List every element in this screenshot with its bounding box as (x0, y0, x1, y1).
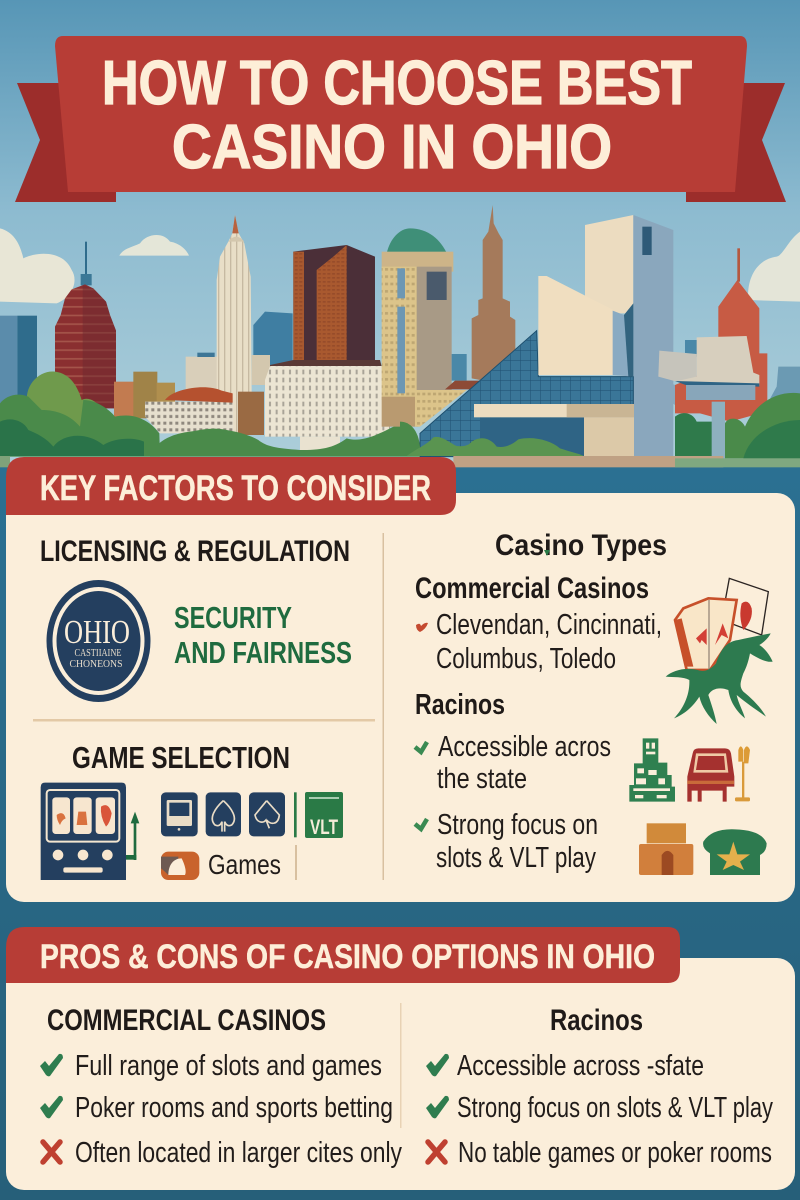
list: accessible across state: Accessible acros (438, 731, 611, 763)
icon: games badge (161, 852, 199, 880)
pro: poker rooms: Poker rooms and sports betting (75, 1092, 393, 1124)
building: low tan (382, 381, 482, 427)
heading: casino types: Casino Types (495, 529, 667, 562)
list: strong focus: Strong focus on (437, 809, 598, 841)
panel background (6, 493, 795, 902)
building: pale back (186, 353, 270, 390)
illustration: Ohio skyline left (0, 215, 400, 467)
list: strong focus (436, 809, 598, 874)
cloud: small (119, 235, 189, 256)
illustration: Ohio skyline right (382, 205, 800, 467)
icon: Ohio seal: OHIO (64, 614, 130, 651)
trees: left (0, 371, 400, 467)
building: brown spire tower (472, 205, 515, 380)
icon: orange building (639, 823, 693, 875)
teal background (0, 467, 800, 1200)
heading: commercial casinos column: COMMERCIAL CASINOS (47, 1004, 326, 1037)
building: blue mid (253, 312, 293, 365)
check: strong focus (415, 819, 427, 829)
spire (737, 248, 740, 282)
heading: licensing: LICENSING & REGULATION (40, 535, 350, 568)
title: CASINO IN OHIO (172, 113, 612, 182)
ribbon tail right (686, 83, 786, 202)
list: strong focus: slots & VLT play (436, 842, 596, 874)
sky background (0, 0, 800, 470)
heading: racinos column: Racinos (550, 1004, 643, 1037)
icon: Ohio seal: CHONEONS (70, 658, 122, 670)
pro: accessible: Accessible across -sfate (457, 1050, 704, 1082)
heading: commercial casinos: Commercial Casinos (415, 572, 649, 605)
cloud: large left (0, 228, 75, 303)
list: commercial cities (436, 609, 662, 675)
building: white offices (265, 360, 390, 451)
ribbon tail left (15, 83, 116, 202)
building: small brown (238, 392, 264, 435)
tab: key factors heading (6, 457, 456, 515)
building: red tower (675, 280, 767, 422)
building: blue left (0, 316, 37, 406)
building: red roof (145, 387, 233, 433)
text: security and fairness (174, 600, 352, 670)
icon: VLT tile (305, 792, 343, 839)
list: accessible across state: the state (437, 763, 527, 795)
con: larger cities: Often located in larger cites only (75, 1137, 402, 1169)
trees: right (400, 393, 800, 458)
tab: pros and cons heading (6, 927, 680, 983)
list: commercial cities: Clevendan, Cincinnati, (436, 609, 662, 641)
icon: slot machine (41, 783, 139, 880)
pro: full range: Full range of slots and games (75, 1050, 382, 1082)
panel: key factors (6, 457, 795, 902)
icon: Ohio seal (46, 580, 150, 702)
rock hall: angled wedge (538, 276, 633, 377)
rock hall: base block (584, 417, 634, 461)
icons: game tiles (161, 792, 297, 837)
buildings: low orange (114, 372, 175, 422)
rock hall: horizontal band (474, 404, 634, 417)
text: security and fairness: SECURITY (174, 600, 292, 635)
column: racinos (426, 1004, 773, 1169)
text: security and fairness: AND FAIRNESS (174, 635, 352, 670)
ribbon main (55, 36, 747, 192)
building: cream tower (217, 215, 252, 433)
rock hall: dark glass lower (480, 417, 585, 457)
icon: cards and horse (666, 578, 773, 724)
column: commercial casinos (40, 1004, 402, 1169)
icon: red chair and lamp (687, 746, 750, 802)
building: blue small (452, 354, 467, 381)
ground: waterfront strip (453, 456, 800, 467)
list: commercial cities: Columbus, Toledo (436, 643, 616, 675)
cloud: right (748, 232, 800, 302)
icon: building (629, 738, 675, 802)
building: brown brick tower (293, 245, 375, 363)
text: games: Games (208, 849, 281, 880)
rock hall: white tower (585, 215, 673, 461)
list: accessible across state (437, 731, 611, 795)
title (102, 49, 692, 182)
tab: pros and cons heading: PROS & CONS OF CASINO OPTIONS IN OHIO (40, 938, 655, 976)
icon: VLT tile: VLT (310, 816, 338, 839)
rock hall: glass pyramid (420, 331, 633, 457)
tab: key factors heading: KEY FACTORS TO CONSIDER (40, 469, 431, 508)
banner ribbon (15, 36, 786, 202)
building: far blue right (769, 367, 800, 400)
check: accessible (415, 742, 427, 752)
icon: Ohio seal: CASTIIAINE (74, 647, 122, 659)
panel: pros and cons (6, 927, 795, 1190)
heading: racinos: Racinos (415, 689, 505, 721)
building: tan dome tower (382, 228, 453, 400)
panel background (6, 958, 795, 1190)
icon: small red heart bullet (416, 623, 428, 632)
rock hall: disk theatre (658, 336, 759, 461)
heading: game selection: GAME SELECTION (72, 740, 290, 775)
icon: green star cap (703, 829, 767, 875)
building: red tower (55, 242, 116, 408)
